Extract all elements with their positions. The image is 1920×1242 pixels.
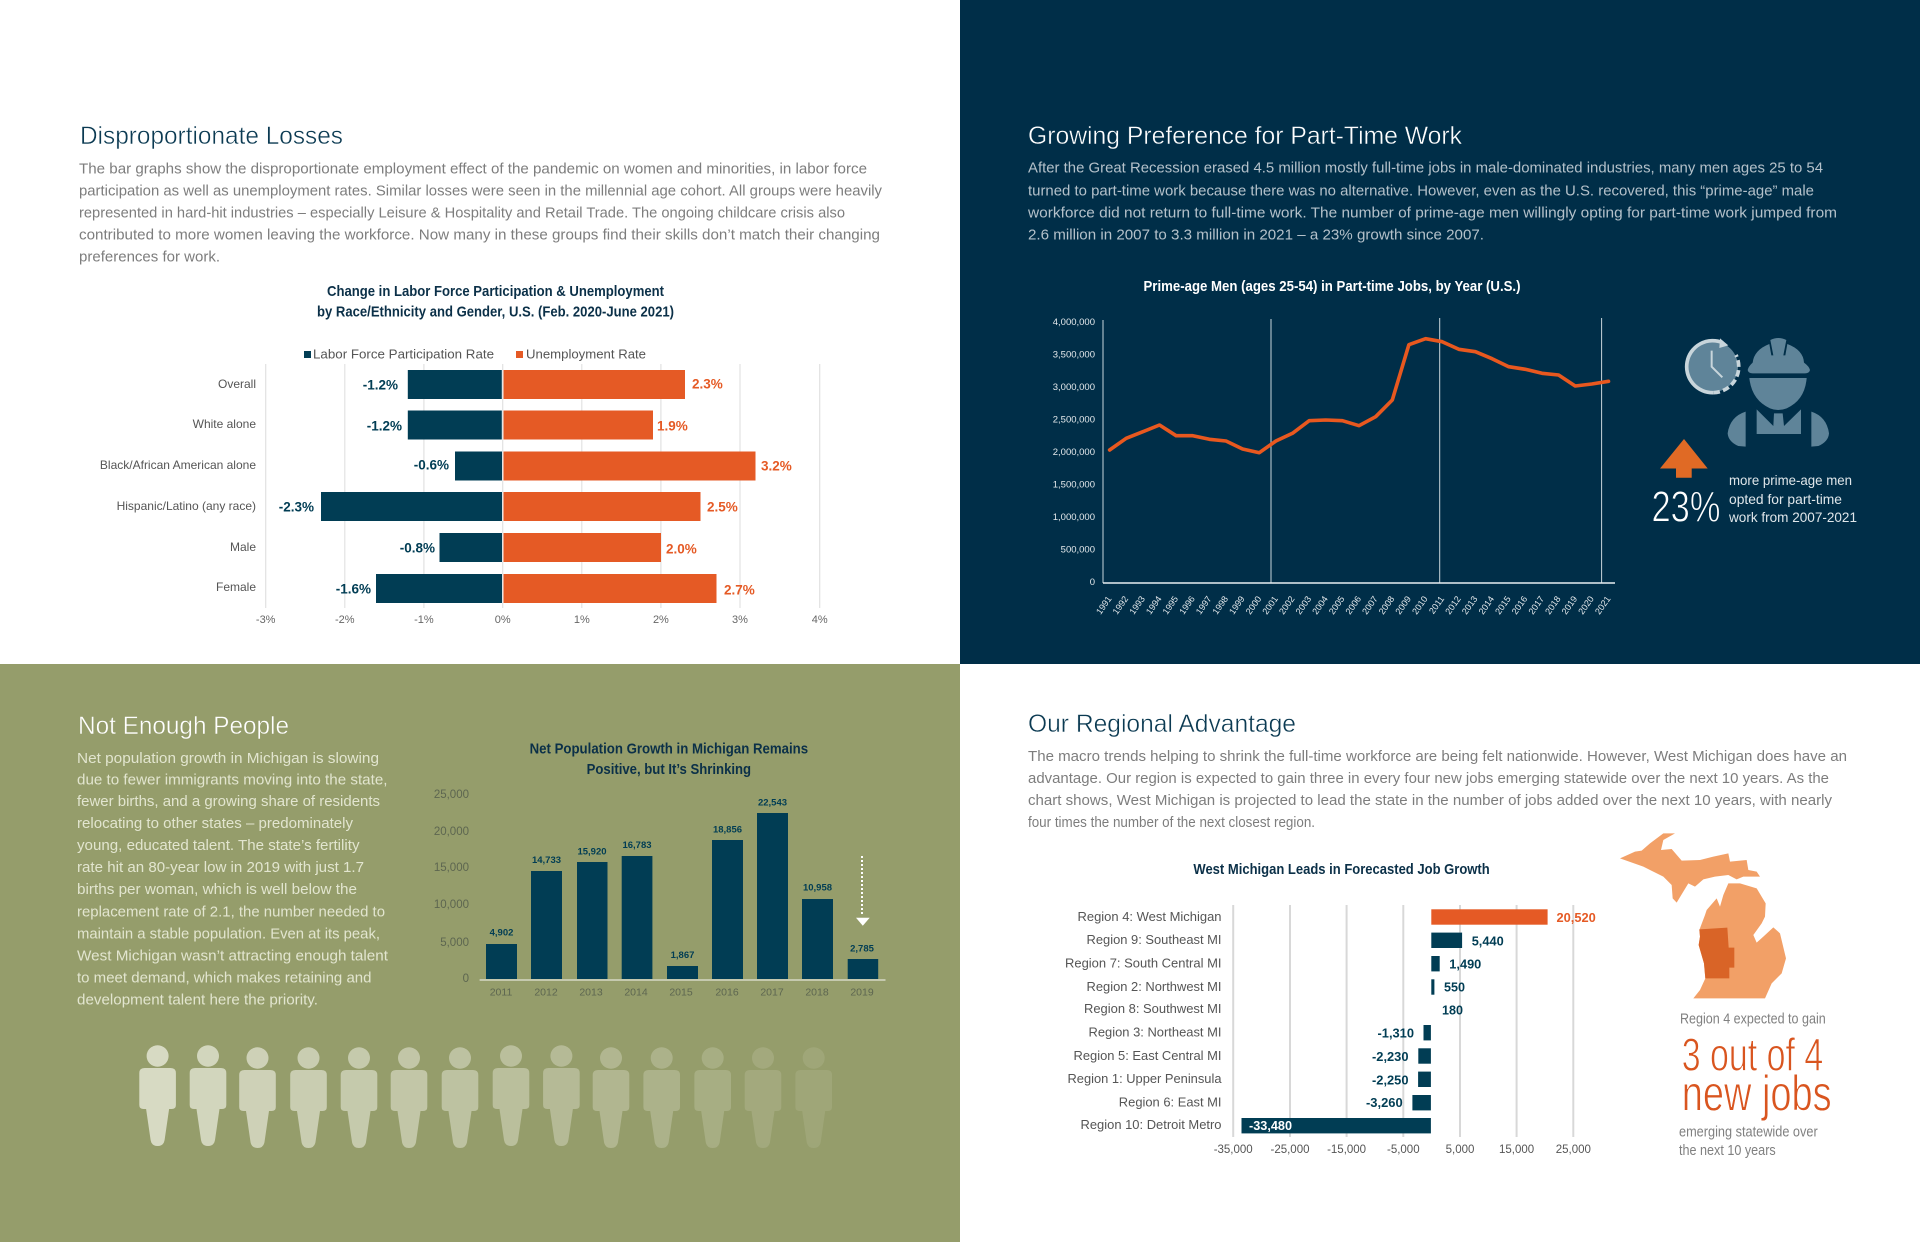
x axis labels: 2010 [1410,594,1430,616]
x axis labels: 1999 [1227,594,1247,616]
text block: population body: young, educated talent. The state’s fertility [77,837,360,854]
legend [304,346,646,362]
text block: population body: relocating to other states – predominately [77,815,354,832]
y axis labels: 10,000 [434,899,469,911]
unemployment values: 2.5% [707,500,738,514]
region labels: Region 10: Detroit Metro [1080,1117,1222,1132]
stat: 23%: 23% [1652,483,1720,532]
region 4 highlight [1699,928,1734,978]
value labels: 1,490 [1449,956,1481,972]
text block: regional body: The macro trends helping to shrink the full-time workforce are being felt nationwide. However, West Michigan does have an [1028,748,1847,765]
chart title: labor force: by Race/Ethnicity and Gender, U.S. (Feb. 2020-June 2021) [317,304,674,320]
stat caption: more prime-age men [1729,472,1852,488]
x axis labels: 2015 [1493,594,1513,616]
x axis labels [256,614,828,626]
lower peninsula [1693,883,1786,998]
y axis labels: 1,000,000 [1053,512,1095,523]
x axis labels: 1993 [1127,594,1147,616]
icon: clock [1687,338,1739,393]
category labels [100,377,256,594]
value labels: 20,520 [1556,910,1596,925]
text block: population body: Net population growth in Michigan is slowing [77,750,379,767]
x axis labels: 2014 [1477,594,1496,616]
chart title: net population: Net Population Growth in Michigan Remains [530,740,808,758]
year labels: 2017 [760,987,784,999]
callout: 3 out of 4 new jobs [1679,1010,1832,1159]
panel: part-time work [960,0,1920,664]
text block: regional body: four times the number of the next closest region. [1028,814,1315,831]
value labels: 10,958 [803,882,832,894]
category labels: Female [216,580,256,594]
y axis labels [434,789,469,985]
value labels: 4,902 [490,928,513,938]
y axis labels [1053,317,1095,588]
value labels: 15,920 [577,846,607,858]
x axis labels: 0% [495,614,511,626]
value labels: 14,733 [532,855,561,866]
text block: losses body: preferences for work. [79,248,220,266]
x axis labels: 1% [574,614,590,626]
bar chart: net population growth [434,789,886,999]
text block: part-time body: After the Great Recession erased 4.5 million mostly full-time jobs in male-dominated industries, many men ages 25 to 54 [1028,160,1823,176]
callout: 3 out of 4 new jobs: Region 4 expected to gain [1680,1010,1826,1028]
x axis labels: 2% [653,614,669,626]
unemployment values [657,376,792,598]
category labels: Hispanic/Latino (any race) [117,499,256,513]
x axis labels: 1994 [1144,594,1164,616]
x axis labels: 1998 [1210,594,1230,616]
participation values: -0.8% [400,540,435,556]
value labels: 180 [1442,1002,1463,1018]
value labels: 16,783 [622,840,652,851]
x axis labels: 2020 [1576,594,1596,616]
year labels: 2012 [534,987,558,999]
year labels: 2018 [805,987,829,999]
text block: regional body: chart shows, West Michigan is projected to lead the state in the number of jobs added over the next 10 years, with nearly [1028,792,1832,809]
text block: losses body: represented in hard-hit industries – especially Leisure & Hospitality and Retail Trade. The ongoing childcare crisis also [79,204,845,222]
icon: up arrow [1660,439,1708,478]
x axis labels: 3% [732,614,748,626]
stat caption: work from 2007-2021 [1728,509,1857,525]
chart title: job growth: West Michigan Leads in Forecasted Job Growth [1193,861,1490,878]
value labels: 2,785 [850,944,875,954]
y axis labels: 20,000 [434,826,469,838]
arrow: dotted downward [856,856,870,926]
x axis labels: 2018 [1543,594,1563,616]
text block: part-time body: turned to part-time work because there was no alternative. However, even as the U.S. recovered, this “prime-age” male [1028,182,1814,200]
unemployment values: 3.2% [761,458,792,474]
icon: michigan map [1620,833,1786,998]
icon: worker [1728,338,1829,447]
x axis labels: 2016 [1510,594,1529,616]
y axis labels: 15,000 [434,862,469,874]
x axis labels: 25,000 [1556,1144,1591,1156]
line chart: prime-age men in part-time jobs [1053,317,1615,616]
x axis labels [1094,594,1613,616]
x axis labels: 2007 [1360,594,1380,616]
participation values [279,378,449,596]
y axis labels: 0 [1090,577,1095,588]
participation values: -2.3% [279,500,314,514]
value labels: 22,543 [758,798,787,808]
text block: population body: development talent here the priority. [77,992,318,1008]
x axis labels: 1991 [1094,594,1114,616]
text block: regional body [1028,748,1847,831]
unemployment values: 1.9% [657,418,688,434]
year labels: 2019 [850,987,874,999]
text block: losses body [79,160,882,266]
callout: 3 out of 4 new jobs: emerging statewide over [1679,1124,1818,1140]
text block: part-time body: workforce did not return to full-time work. The number of prime-age men willingly opting for part-time work jumped from [1027,204,1837,222]
text block: population body: fewer births, and a growing share of residents [77,793,380,810]
text block: part-time body: 2.6 million in 2007 to 3.3 million in 2021 – a 23% growth since 2007. [1028,226,1484,244]
region labels [1065,909,1222,1132]
stat caption: opted for part-time [1729,491,1842,507]
year labels: 2014 [624,987,648,999]
x axis labels: 2009 [1393,594,1413,616]
callout: 3 out of 4 new jobs: new jobs [1682,1066,1832,1122]
x axis labels: 1995 [1161,594,1180,616]
year labels: 2015 [669,987,693,999]
x axis labels: 2008 [1377,594,1396,616]
x axis labels: 2002 [1277,594,1297,616]
bars: female [376,574,716,603]
x axis labels: 1996 [1177,594,1197,616]
year labels: 2016 [715,987,739,999]
y axis labels: 2,000,000 [1053,447,1095,458]
x axis labels: 2012 [1443,594,1463,616]
text block: population body: rate hit an 80-year low in 2019 with just 1.7 [77,859,364,876]
participation values: -0.6% [414,458,449,472]
value labels: 5,440 [1472,934,1504,948]
region labels: Region 8: Southwest MI [1084,1001,1222,1016]
x axis labels: 2019 [1560,594,1579,616]
value labels: -33,480 [1249,1118,1292,1133]
region labels: Region 3: Northeast MI [1088,1024,1222,1040]
heading: Growing Preference: Growing Preference for Part-Time Work [1028,122,1462,150]
region labels: Region 1: Upper Peninsula [1068,1071,1222,1086]
x axis labels: -2% [335,614,355,626]
y axis labels: 0 [463,973,469,985]
category labels: Black/African American alone [100,458,256,472]
x axis labels: 2004 [1310,594,1330,616]
x axis labels [1214,1144,1591,1156]
category labels: Male [230,540,256,554]
value labels [1249,910,1596,1133]
data line [1110,339,1608,453]
region labels: Region 9: Southeast MI [1086,932,1222,947]
chart title: net population [530,740,808,778]
x axis labels: 4% [812,614,828,626]
legend: Labor Force Participation Rate [313,346,494,362]
chart title: labor force: Change in Labor Force Participation & Unemployment [327,283,664,300]
y axis labels: 1,500,000 [1053,480,1095,490]
text block: losses body: participation as well as unemployment rates. Similar losses were seen in the millennial age cohort. All groups were heavily [79,182,882,200]
category labels: White alone [193,417,256,431]
y axis labels: 3,500,000 [1053,350,1095,360]
y axis labels: 3,000,000 [1053,382,1095,393]
chart title: labor force [317,283,674,320]
participation values: -1.2% [363,378,398,392]
bars [1242,909,1548,1133]
participation values: -1.6% [336,582,371,596]
x axis labels: 1997 [1194,594,1213,616]
bars: overall [408,370,685,399]
x axis labels: -3% [256,614,276,626]
region labels: Region 6: East MI [1119,1094,1222,1110]
participation values: -1.2% [367,418,402,434]
x axis labels: 2005 [1327,594,1346,616]
x axis labels: 2003 [1294,594,1313,616]
text block: losses body: The bar graphs show the disproportionate employment effect of the pandemic on women and minorities, in labor force [79,160,867,178]
chart title: net population: Positive, but It’s Shrinking [587,761,751,778]
text block: population body: due to fewer immigrants moving into the state, [77,772,388,788]
panel: regional advantage [960,664,1920,1242]
x axis labels: 2021 [1593,594,1613,616]
heading: Disproportionate Losses: Disproportionate Losses [80,122,343,150]
text block: population body: replacement rate of 2.1, the number needed to [77,904,385,920]
bars: black/african american alone [455,452,756,480]
value labels: 1,867 [671,950,694,961]
bar chart: participation and unemployment [100,364,828,626]
unemployment values: 2.0% [666,542,697,556]
panel: not enough people [0,664,960,1242]
y axis labels: 5,000 [440,937,469,949]
region labels: Region 5: East Central MI [1074,1048,1222,1063]
year labels [490,987,874,999]
panel: disproportionate losses [0,0,960,664]
text block: population body [77,750,389,1008]
chart title: prime-age men: Prime-age Men (ages 25-54) in Part-time Jobs, by Year (U.S.) [1144,278,1521,295]
value labels: 18,856 [713,824,742,836]
year labels: 2013 [579,987,603,999]
bars: white alone [408,410,653,440]
x axis labels: 2001 [1260,594,1280,616]
text block: population body: to meet demand, which makes retaining and [77,970,372,986]
text block: losses body: contributed to more women leaving the workforce. Now many in these groups find their skills don’t match their changing [79,226,880,244]
value labels: -2,250 [1372,1072,1408,1088]
region labels: Region 2: Northwest MI [1086,979,1222,994]
text block: population body: maintain a stable population. Even at its peak, [77,926,380,942]
x axis labels: 2006 [1343,594,1363,616]
upper peninsula [1620,833,1760,903]
y axis labels: 500,000 [1061,544,1095,556]
bars: male [440,533,661,562]
value labels: -2,230 [1372,1049,1408,1064]
bars [486,813,878,979]
text block: population body: West Michigan wasn’t attracting enough talent [77,948,389,964]
x axis labels: -25,000 [1270,1144,1310,1156]
value labels: 550 [1444,980,1465,994]
year labels: 2011 [490,987,512,999]
x axis labels: -15,000 [1327,1144,1366,1156]
bars: hispanic/latino [321,492,700,521]
value labels [490,798,875,961]
value labels: -1,310 [1378,1026,1414,1040]
callout: 3 out of 4 new jobs: the next 10 years [1679,1142,1776,1159]
y axis labels: 2,500,000 [1053,414,1095,426]
text block: population body: births per woman, which is well below the [77,881,357,898]
x axis labels: 15,000 [1499,1144,1534,1156]
x axis labels: 2011 [1427,594,1446,616]
value labels: -3,260 [1366,1095,1403,1110]
heading: Our Regional Advantage: Our Regional Advantage [1028,710,1296,738]
x axis labels: -1% [414,614,434,626]
heading: Not Enough People: Not Enough People [78,712,289,740]
x axis labels: 2017 [1526,594,1546,616]
x axis labels: 5,000 [1446,1144,1474,1156]
category labels: Overall [218,377,256,391]
x axis labels: -35,000 [1214,1144,1253,1156]
x axis labels: -5,000 [1387,1144,1420,1156]
y axis labels: 4,000,000 [1053,317,1095,328]
x axis labels: 2000 [1244,594,1263,616]
stat caption [1728,472,1857,525]
region labels: Region 4: West Michigan [1078,909,1222,924]
region labels: Region 7: South Central MI [1065,956,1222,970]
bar chart: forecasted job growth [1065,905,1596,1156]
icon row: fading people [139,1045,832,1148]
text block: regional body: advantage. Our region is expected to gain three in every four new jobs emerging statewide over the next 10 years. As the [1028,770,1829,787]
unemployment values: 2.7% [724,582,755,598]
y axis labels: 25,000 [434,789,469,801]
legend: Unemployment Rate [526,346,646,362]
callout: 3 out of 4 new jobs: 3 out of 4 [1682,1029,1823,1081]
unemployment values: 2.3% [692,376,723,392]
x axis labels: 2013 [1460,594,1479,616]
text block: part-time body [1027,160,1837,244]
x axis labels: 1992 [1111,594,1130,616]
